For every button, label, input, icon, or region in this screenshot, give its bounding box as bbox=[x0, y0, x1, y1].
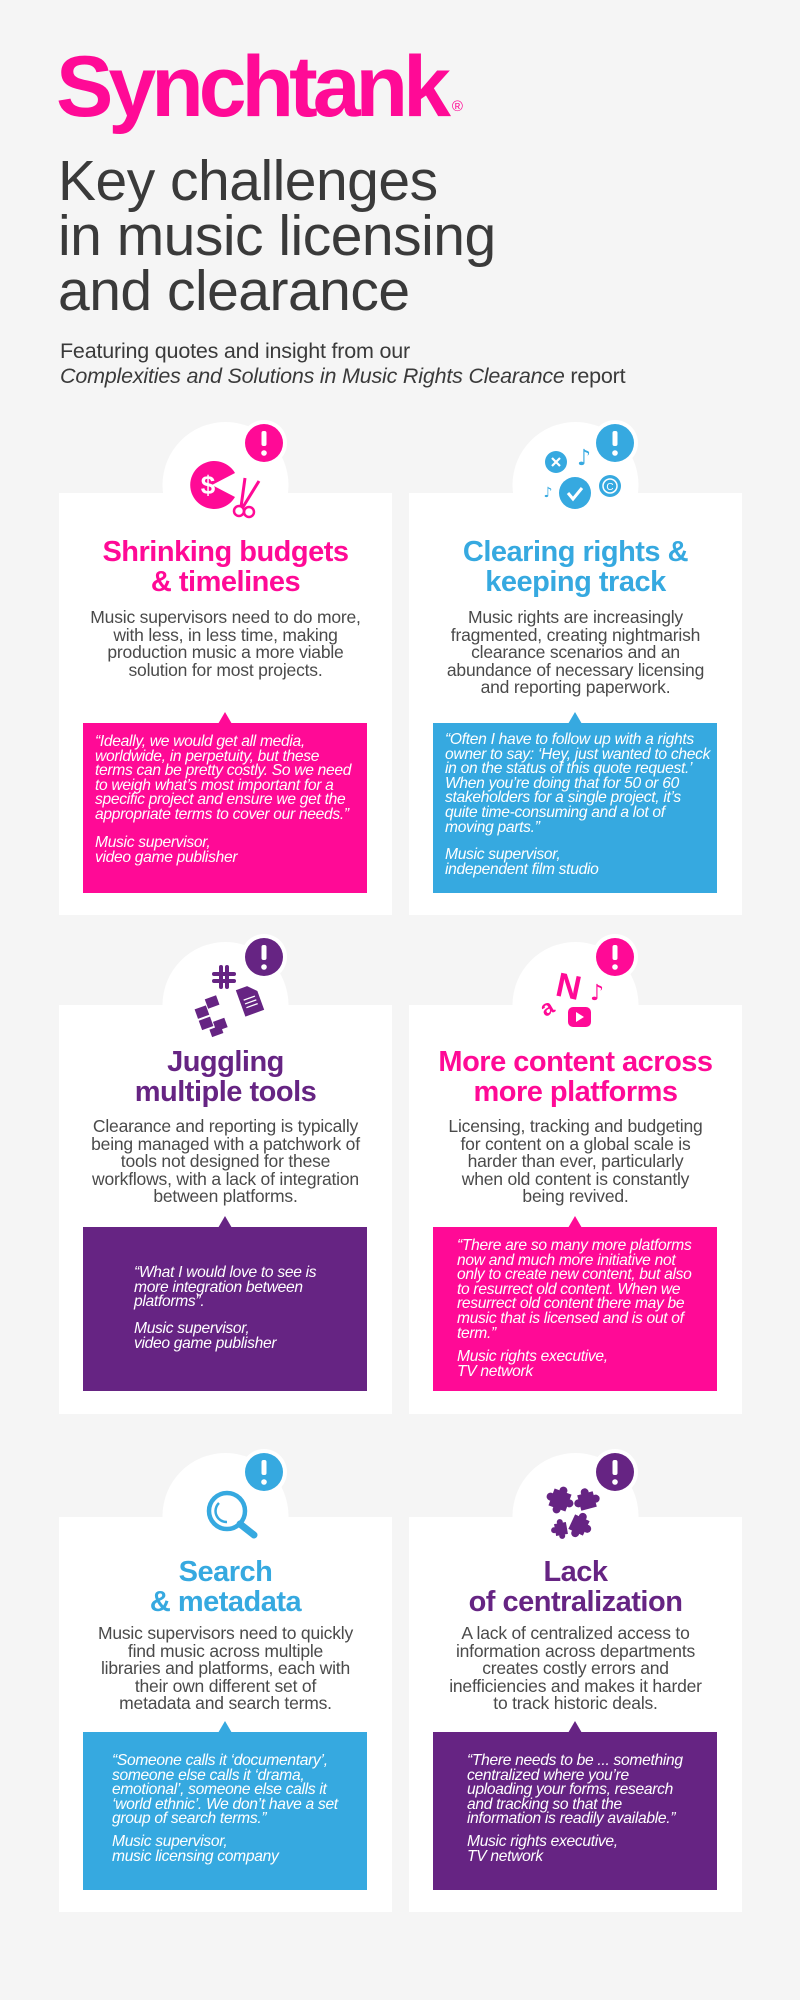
quote box: TV network bbox=[467, 1848, 543, 1865]
heading bbox=[463, 536, 688, 598]
body text bbox=[449, 1623, 702, 1713]
quote box: Music supervisor, bbox=[95, 834, 210, 851]
body text bbox=[448, 1116, 703, 1206]
body text: when old content is constantly bbox=[462, 1169, 689, 1189]
body text: being revived. bbox=[522, 1186, 629, 1206]
quote box: to weigh what’s most important for a bbox=[95, 777, 334, 794]
body text: find music across multiple bbox=[128, 1641, 323, 1661]
quote box: Music rights executive, bbox=[467, 1833, 618, 1850]
quote box: specific project and ensure we get the bbox=[95, 791, 345, 808]
quote box bbox=[433, 1732, 717, 1890]
icon: puzzle pieces bbox=[512, 1449, 638, 1539]
quote box: group of search terms.” bbox=[112, 1810, 266, 1827]
subtitle: Featuring quotes and insight from our bbox=[60, 339, 410, 363]
quote box: independent film studio bbox=[445, 861, 598, 878]
heading bbox=[135, 1046, 316, 1108]
body text: creates costly errors and bbox=[482, 1658, 669, 1678]
quote box: in on the status of this quote request.’ bbox=[445, 760, 692, 777]
body text: clearance scenarios and an bbox=[471, 642, 680, 662]
icon: rights: C bbox=[606, 482, 614, 493]
body text: Licensing, tracking and budgeting bbox=[448, 1116, 703, 1136]
quote box: “What I would love to see is bbox=[134, 1264, 316, 1281]
quote box: appropriate terms to cover our needs.” bbox=[95, 806, 349, 823]
quote box: Music rights executive, bbox=[457, 1348, 608, 1365]
heading: Shrinking budgets bbox=[102, 536, 349, 568]
quote box: term.” bbox=[457, 1325, 496, 1342]
icon: budget cut bbox=[162, 420, 288, 518]
body text: to track historic deals. bbox=[493, 1693, 658, 1713]
heading: & metadata bbox=[150, 1586, 301, 1618]
body text: their own different set of bbox=[135, 1676, 316, 1696]
heading bbox=[438, 1046, 713, 1108]
icon: platforms bbox=[512, 934, 638, 1027]
heading: & timelines bbox=[151, 566, 300, 598]
quote box: “Often I have to follow up with a rights bbox=[445, 731, 694, 748]
quote box: video game publisher bbox=[134, 1335, 276, 1352]
body text: A lack of centralized access to bbox=[461, 1623, 690, 1643]
quote box bbox=[433, 1227, 717, 1391]
quote box: stakeholders for a single project, it’s bbox=[445, 789, 681, 806]
quote box: “Someone calls it ‘documentary’, bbox=[112, 1752, 328, 1769]
heading: Juggling bbox=[167, 1046, 284, 1078]
icon: platforms: ♪ bbox=[590, 981, 604, 1006]
icon: rights: ♪ bbox=[577, 446, 591, 471]
body text bbox=[91, 1116, 360, 1206]
quote box bbox=[83, 1227, 367, 1391]
icon: tools bbox=[162, 934, 288, 1038]
title: in music licensing bbox=[58, 204, 496, 268]
quote box: When you’re doing that for 50 or 60 bbox=[445, 775, 679, 792]
quote box: “There needs to be ... something bbox=[467, 1752, 683, 1769]
icon: magnifier bbox=[162, 1449, 288, 1538]
body text bbox=[447, 607, 704, 697]
quote box: centralized where you’re bbox=[467, 1767, 629, 1784]
panel: more content bbox=[409, 1005, 742, 1414]
quote box: information is readily available.” bbox=[467, 1810, 675, 1827]
icon: platforms: N bbox=[553, 966, 585, 1008]
heading: More content across bbox=[438, 1046, 713, 1078]
body text: production music a more viable bbox=[107, 642, 344, 662]
quote box: worldwide, in perpetuity, but these bbox=[95, 748, 319, 765]
panel: lack of centralization bbox=[409, 1517, 742, 1912]
body text: between platforms. bbox=[153, 1186, 298, 1206]
heading bbox=[102, 536, 349, 598]
quote box: resurrect old content there may be bbox=[457, 1295, 684, 1312]
icon: platforms: a bbox=[535, 993, 559, 1021]
heading: of centralization bbox=[469, 1586, 682, 1618]
quote box: platforms”. bbox=[134, 1293, 204, 1310]
quote box: Music supervisor, bbox=[112, 1833, 227, 1850]
body text: for content on a global scale is bbox=[460, 1134, 690, 1154]
quote box bbox=[83, 723, 367, 893]
heading bbox=[469, 1556, 682, 1618]
icon: rights bbox=[512, 420, 638, 509]
quote box: music licensing company bbox=[112, 1848, 278, 1865]
body text: fragmented, creating nightmarish bbox=[451, 625, 700, 645]
logo: Synchtank ® bbox=[56, 39, 463, 135]
quote box: moving parts.” bbox=[445, 819, 540, 836]
quote box: terms can be pretty costly. So we need bbox=[95, 762, 351, 779]
quote box: more integration between bbox=[134, 1279, 303, 1296]
quote box bbox=[433, 723, 717, 893]
body text: metadata and search terms. bbox=[119, 1693, 332, 1713]
quote box: video game publisher bbox=[95, 849, 237, 866]
quote box: music that is licensed and is out of bbox=[457, 1310, 684, 1327]
body text: solution for most projects. bbox=[128, 660, 322, 680]
body text bbox=[98, 1623, 354, 1713]
body text: Music supervisors need to do more, bbox=[90, 607, 361, 627]
title: Key challenges bbox=[58, 149, 438, 213]
quote box: only to create new content, but also bbox=[457, 1266, 692, 1283]
body text: harder than ever, particularly bbox=[468, 1151, 683, 1171]
quote box: Music supervisor, bbox=[445, 846, 560, 863]
icon: rights: ♪ bbox=[544, 485, 552, 501]
panel: clearing rights bbox=[409, 493, 742, 915]
body text: Music supervisors need to quickly bbox=[98, 1623, 353, 1643]
quote box: now and much more initiative not bbox=[457, 1252, 675, 1269]
body text: abundance of necessary licensing bbox=[447, 660, 704, 680]
body text: being managed with a patchwork of bbox=[91, 1134, 360, 1154]
quote box: TV network bbox=[457, 1363, 533, 1380]
quote box: and tracking so that the bbox=[467, 1796, 622, 1813]
body text: libraries and platforms, each with bbox=[101, 1658, 350, 1678]
heading: more platforms bbox=[473, 1076, 678, 1108]
quote box: Music supervisor, bbox=[134, 1320, 249, 1337]
heading: Lack bbox=[543, 1556, 608, 1588]
icon: budget cut: $ bbox=[201, 470, 216, 500]
body text: Music rights are increasingly bbox=[468, 607, 683, 627]
heading: Clearing rights & bbox=[463, 536, 688, 568]
quote box: ‘world ethnic’. We don’t have a set bbox=[112, 1796, 338, 1813]
heading: Search bbox=[179, 1556, 272, 1588]
body text: with less, in less time, making bbox=[113, 625, 338, 645]
body text: information across departments bbox=[456, 1641, 695, 1661]
quote box bbox=[83, 1732, 367, 1890]
title bbox=[58, 149, 496, 323]
quote box: uploading your forms, research bbox=[467, 1781, 673, 1798]
quote box: quite time-consuming and a lot of bbox=[445, 804, 665, 821]
body text: tools not designed for these bbox=[121, 1151, 330, 1171]
body text: and reporting paperwork. bbox=[481, 677, 670, 697]
heading: keeping track bbox=[485, 566, 666, 598]
body text bbox=[90, 607, 361, 680]
subtitle bbox=[60, 339, 626, 388]
body text: inefficiencies and makes it harder bbox=[449, 1676, 702, 1696]
title: and clearance bbox=[58, 259, 410, 323]
heading bbox=[150, 1556, 302, 1618]
body text: Clearance and reporting is typically bbox=[93, 1116, 358, 1136]
quote box: emotional’, someone else calls it bbox=[112, 1781, 327, 1798]
panel: shrinking budgets bbox=[59, 493, 392, 915]
quote box: someone else calls it ‘drama, bbox=[112, 1767, 304, 1784]
body text: workflows, with a lack of integration bbox=[92, 1169, 359, 1189]
panel: juggling tools bbox=[59, 1005, 392, 1414]
panel: search & metadata bbox=[59, 1517, 392, 1912]
quote box: “There are so many more platforms bbox=[457, 1237, 691, 1254]
heading: multiple tools bbox=[135, 1076, 316, 1108]
quote box: “Ideally, we would get all media, bbox=[95, 733, 305, 750]
subtitle: Complexities and Solutions in Music Rights Clearance report bbox=[60, 364, 625, 388]
quote box: owner to say: ‘Hey, just wanted to check bbox=[445, 746, 710, 763]
quote box: to resurrect old content. When we bbox=[457, 1281, 680, 1298]
